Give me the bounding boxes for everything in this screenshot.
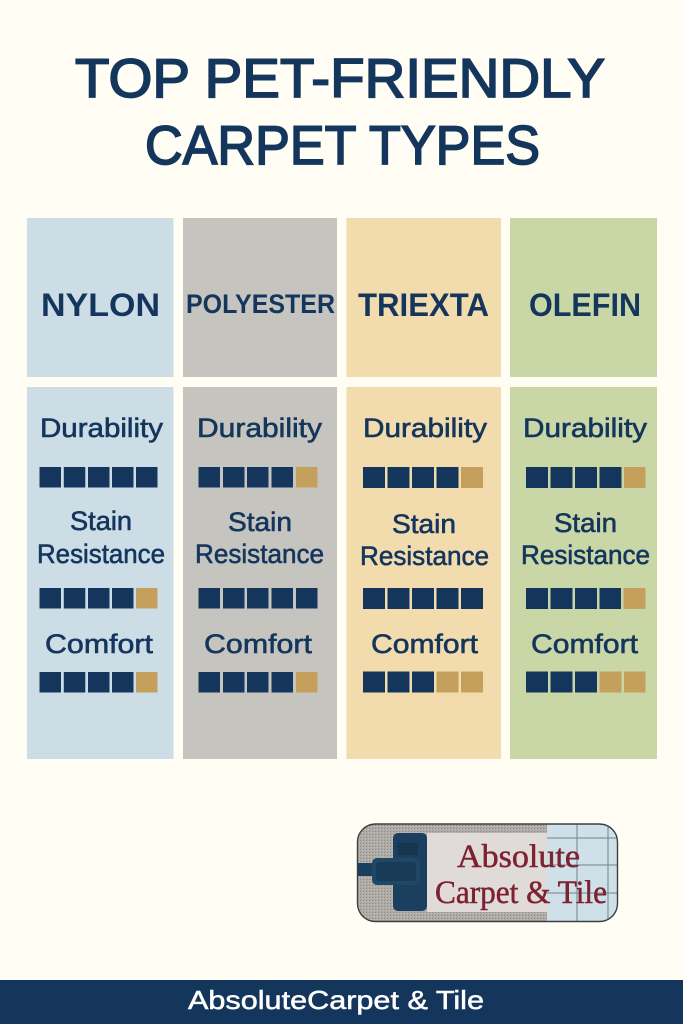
logo: Absolute Carpet & Tile — [357, 823, 618, 922]
olefin durability label: Durability — [523, 413, 648, 443]
panel: triexta header: TRIEXTA — [358, 287, 489, 323]
icon: vacuum head — [358, 833, 427, 911]
polyester comfort label: Comfort — [204, 629, 313, 659]
polyester durability label: Durability — [197, 413, 323, 443]
olefin stain resistance label: Stain — [554, 508, 617, 538]
olefin comfort rating 3 of 5 — [526, 672, 646, 692]
title: TOP PET-FRIENDLY — [75, 47, 605, 109]
panel: polyester header: POLYESTER — [186, 289, 335, 319]
nylon stain resistance label — [37, 506, 165, 569]
panel: nylon header: NYLON — [41, 287, 160, 323]
olefin stain rating 4 of 5 — [526, 588, 646, 609]
triexta stain resistance label — [360, 509, 489, 571]
nylon comfort rating 4 of 5 — [40, 672, 158, 692]
triexta durability label: Durability — [363, 413, 488, 443]
logo wordmark — [435, 839, 607, 911]
title — [75, 47, 605, 176]
triexta stain resistance label: Resistance — [360, 541, 489, 571]
nylon stain rating 4 of 5 — [40, 588, 158, 608]
panel: nylon ratings — [27, 387, 174, 759]
title: CARPET TYPES — [145, 114, 540, 176]
panel: triexta ratings — [346, 387, 501, 759]
triexta durability rating 4 of 5 — [363, 467, 483, 488]
nylon stain resistance label: Resistance — [37, 539, 165, 569]
polyester stain rating 5 of 5 — [198, 588, 318, 608]
nylon stain resistance label: Stain — [70, 506, 132, 536]
panel: polyester header — [183, 218, 337, 377]
panel: polyester ratings — [183, 387, 337, 759]
panel: olefin header: OLEFIN — [529, 287, 641, 323]
footer bar — [0, 980, 683, 1024]
panel: nylon header — [27, 218, 174, 377]
triexta comfort label: Comfort — [371, 629, 479, 659]
logo wordmark: Carpet & Tile — [435, 875, 607, 911]
olefin stain resistance label: Resistance — [521, 540, 650, 570]
triexta comfort rating 3 of 5 — [363, 672, 483, 692]
olefin stain resistance label — [521, 508, 650, 570]
panel: olefin ratings — [510, 387, 657, 759]
polyester comfort rating 4 of 5 — [198, 672, 318, 692]
footer bar: AbsoluteCarpet & Tile — [188, 985, 484, 1015]
polyester stain resistance label: Stain — [228, 507, 292, 537]
triexta stain rating 5 of 5 — [363, 588, 483, 609]
logo wordmark: Absolute — [457, 839, 580, 875]
panel: olefin header — [510, 218, 657, 377]
nylon comfort label: Comfort — [45, 629, 154, 659]
nylon durability label: Durability — [40, 413, 164, 443]
polyester stain resistance label — [195, 507, 324, 569]
polyester durability rating 4 of 5 — [198, 467, 318, 488]
panel: triexta header — [346, 218, 501, 377]
olefin durability rating 4 of 5 — [526, 467, 646, 488]
nylon durability rating 5 of 5 — [40, 467, 158, 488]
triexta stain resistance label: Stain — [392, 509, 456, 539]
olefin comfort label: Comfort — [531, 629, 639, 659]
polyester stain resistance label: Resistance — [195, 539, 324, 569]
